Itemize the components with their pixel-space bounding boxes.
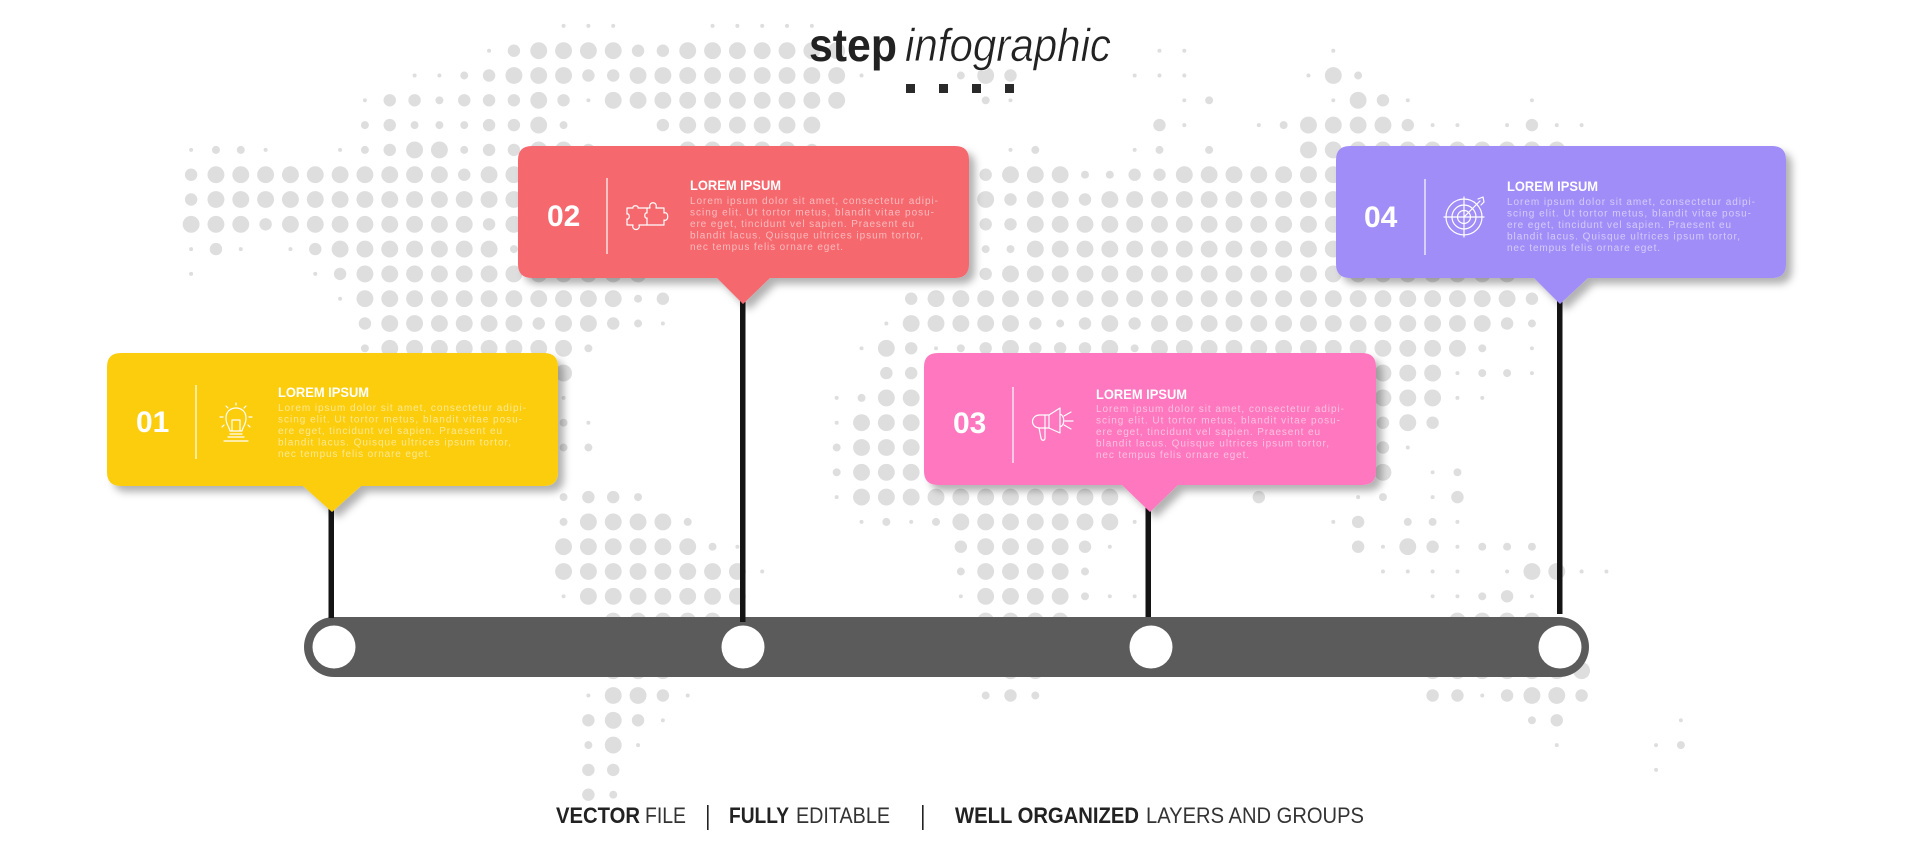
text 04: ere eget, tincidunt vel sapien. Praesent eu [1507,220,1731,231]
background: halftone world map [191,26,1681,795]
divider 03 [1012,387,1014,463]
title [809,19,1111,71]
text 01: nec tempus felis ornare eget. [278,449,431,460]
text 03: blandit lacus. Quisque ultrices ipsum tortor, [1096,438,1329,450]
text 01: LOREM IPSUM [278,384,369,400]
panel: step 01 [107,353,558,512]
divider 04 [1424,179,1426,255]
text 01: scing elit. Ut tortor metus, blandit vitae posu- [278,414,522,426]
footer text: FILE [645,803,686,828]
text 02: nec tempus felis ornare eget. [690,242,843,253]
footer text: EDITABLE [796,803,890,828]
icon: target [1444,197,1484,237]
icon: megaphone [1032,408,1073,440]
timeline bar [304,617,1589,677]
text 03: ere eget, tincidunt vel sapien. Praesent eu [1096,427,1320,438]
text 03: LOREM IPSUM [1096,386,1187,402]
text 01 [278,384,526,460]
text 04: nec tempus felis ornare eget. [1507,243,1660,254]
text 02 [690,177,938,253]
footer text [556,803,1364,830]
divider 02 [606,178,608,254]
text 04: blandit lacus. Quisque ultrices ipsum tortor, [1507,232,1740,242]
footer text: FULLY [729,803,789,828]
icon: puzzle [627,203,668,230]
title: step [809,19,897,71]
text 02: scing elit. Ut tortor metus, blandit vitae posu- [690,208,934,218]
card shape 01 [107,353,558,512]
title: infographic [905,19,1111,71]
text 03 [1096,386,1344,461]
connector stems [328,298,1562,622]
title dots [906,84,1014,93]
text 04: scing elit. Ut tortor metus, blandit vitae posu- [1507,208,1751,220]
card shape 02 [518,146,969,304]
footer text: LAYERS AND GROUPS [1146,803,1364,828]
divider 01 [195,385,197,459]
text 04 [1507,178,1755,254]
icon: light bulb [220,403,252,441]
card shape 03 [924,353,1376,512]
footer text: WELL ORGANIZED [955,803,1139,828]
number 01: 01 [136,406,169,439]
text 03: scing elit. Ut tortor metus, blandit vitae posu- [1096,416,1340,426]
text 01: Lorem ipsum dolor sit amet, consectetur adipi- [278,403,526,414]
panel: step 03 [924,353,1376,512]
text 02: ere eget, tincidunt vel sapien. Praesent eu [690,219,914,230]
timeline nodes [312,626,1582,668]
text 04: Lorem ipsum dolor sit amet, consectetur adipi- [1507,197,1755,208]
text 02: blandit lacus. Quisque ultrices ipsum tortor, [690,230,923,242]
footer text: VECTOR [556,803,640,828]
text 01: ere eget, tincidunt vel sapien. Praesent eu [278,426,502,437]
text 02: LOREM IPSUM [690,177,781,193]
text 04: LOREM IPSUM [1507,178,1598,194]
panel: step 04 [1336,146,1786,304]
text 03: Lorem ipsum dolor sit amet, consectetur adipi- [1096,404,1344,415]
text 02: Lorem ipsum dolor sit amet, consectetur adipi- [690,196,938,207]
text 01: blandit lacus. Quisque ultrices ipsum tortor, [278,438,511,448]
number 03: 03 [953,407,986,440]
card shape 04 [1336,146,1786,304]
number 04: 04 [1364,201,1398,234]
text 03: nec tempus felis ornare eget. [1096,450,1249,461]
number 02: 02 [547,200,580,233]
panel: step 02 [518,146,969,304]
